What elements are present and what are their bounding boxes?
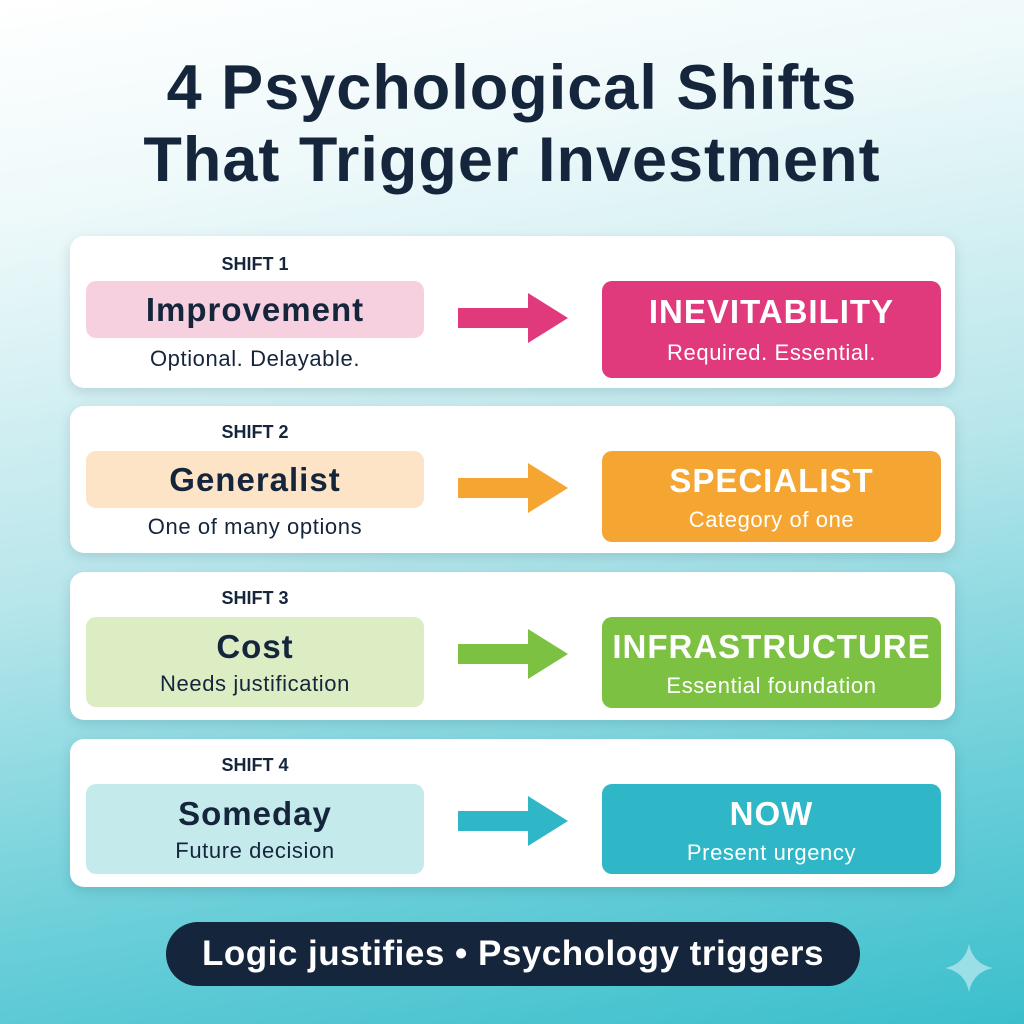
- panel: shift 1: [70, 236, 955, 388]
- box: infrastructure: Essential foundation: [666, 673, 877, 698]
- box: specialist: Category of one: [689, 507, 854, 532]
- text: optional: Optional. Delayable.: [150, 346, 360, 371]
- arrow: [458, 629, 568, 679]
- label: shift 1: SHIFT 1: [221, 254, 288, 274]
- box: inevitability: Required. Essential.: [667, 340, 876, 365]
- box: inevitability: INEVITABILITY: [649, 293, 894, 330]
- box: infrastructure: INFRASTRUCTURE: [612, 628, 931, 665]
- box: generalist: Generalist: [169, 461, 341, 498]
- label: shift 2: SHIFT 2: [221, 422, 288, 442]
- box: cost: [86, 617, 424, 707]
- title: [143, 53, 881, 195]
- label: shift 3: SHIFT 3: [221, 588, 288, 608]
- box: cost: Cost: [216, 628, 294, 665]
- box: specialist: SPECIALIST: [669, 462, 874, 499]
- box: cost: Needs justification: [160, 671, 350, 696]
- footer pill: [166, 922, 860, 986]
- box: improvement: Improvement: [146, 291, 364, 328]
- title: That Trigger Investment: [143, 125, 881, 195]
- box: now: [602, 784, 941, 874]
- panel: shift 4: [70, 739, 955, 887]
- footer pill: Logic justifies • Psychology triggers: [202, 934, 824, 973]
- box: improvement: [86, 281, 424, 338]
- box: now: Present urgency: [687, 840, 856, 865]
- title: 4 Psychological Shifts: [167, 53, 857, 123]
- label: shift 4: SHIFT 4: [221, 755, 288, 775]
- arrow: [458, 293, 568, 343]
- box: someday: [86, 784, 424, 874]
- box: now: NOW: [730, 795, 813, 832]
- icon: sparkle: [945, 944, 993, 992]
- box: someday: Someday: [178, 795, 332, 832]
- text: one of many: One of many options: [148, 514, 362, 539]
- box: inevitability: [602, 281, 941, 378]
- panel: shift 2: [70, 406, 955, 553]
- box: generalist: [86, 451, 424, 508]
- arrow: [458, 463, 568, 513]
- box: someday: Future decision: [175, 838, 335, 863]
- panel: shift 3: [70, 572, 955, 720]
- arrow: [458, 796, 568, 846]
- box: infrastructure: [602, 617, 941, 708]
- box: specialist: [602, 451, 941, 542]
